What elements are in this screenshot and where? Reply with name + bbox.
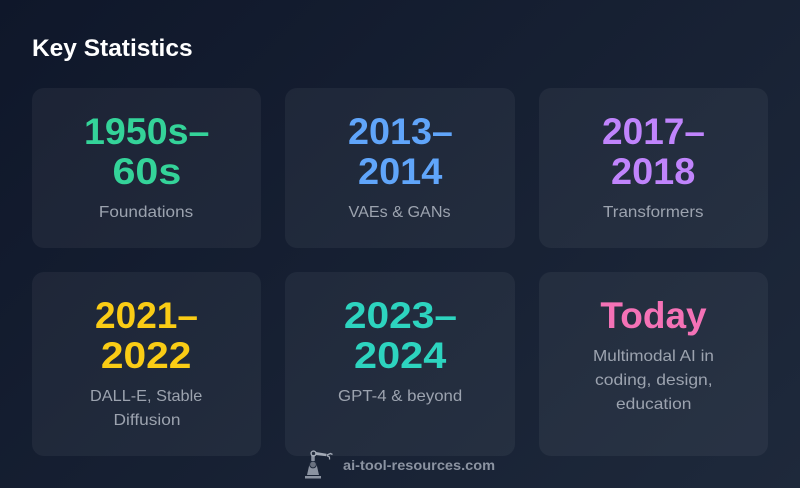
- stat value: 2023–: [343, 295, 457, 336]
- stat value: 1950s–: [84, 111, 209, 152]
- stat label: Transformers: [603, 204, 704, 221]
- stat value: 2014: [358, 151, 442, 192]
- stat value: [84, 111, 209, 192]
- stat value: 2018: [611, 151, 696, 192]
- stat label: Diffusion: [113, 412, 180, 429]
- stat value: 2013–: [348, 111, 452, 152]
- panel: 1950s-60s: [32, 88, 261, 248]
- panel: 2021-2022: [32, 272, 261, 456]
- panel: 2023-2024: [285, 272, 515, 456]
- stat value: 2024: [354, 335, 446, 376]
- panel: 2017-2018: [539, 88, 768, 248]
- icon: robot arm: [305, 450, 333, 478]
- stat label: [593, 348, 714, 413]
- stat value: [95, 295, 198, 376]
- stat value: [602, 111, 705, 192]
- stat label: education: [616, 396, 691, 413]
- title: Key Statistics: [32, 35, 193, 62]
- stat label: coding, design,: [595, 372, 712, 389]
- stat label: Multimodal AI in: [593, 348, 714, 365]
- panel: Today: [539, 272, 768, 456]
- stat label: GPT-4 & beyond: [338, 388, 462, 405]
- stat value: 2021–: [95, 295, 198, 336]
- stat value: [343, 295, 457, 376]
- stat value: [348, 111, 452, 192]
- stat value: 2022: [101, 335, 192, 376]
- panel: 2013-2014: [285, 88, 515, 248]
- stat value: 2017–: [602, 111, 705, 152]
- stat label: VAEs & GANs: [349, 204, 451, 221]
- footer website label: ai-tool-resources.com: [343, 457, 495, 473]
- stat label: [90, 388, 203, 429]
- stat value: 60s: [112, 151, 181, 192]
- stat label: DALL-E, Stable: [90, 388, 203, 405]
- stat label: Foundations: [99, 204, 194, 221]
- stat value: Today: [600, 295, 707, 336]
